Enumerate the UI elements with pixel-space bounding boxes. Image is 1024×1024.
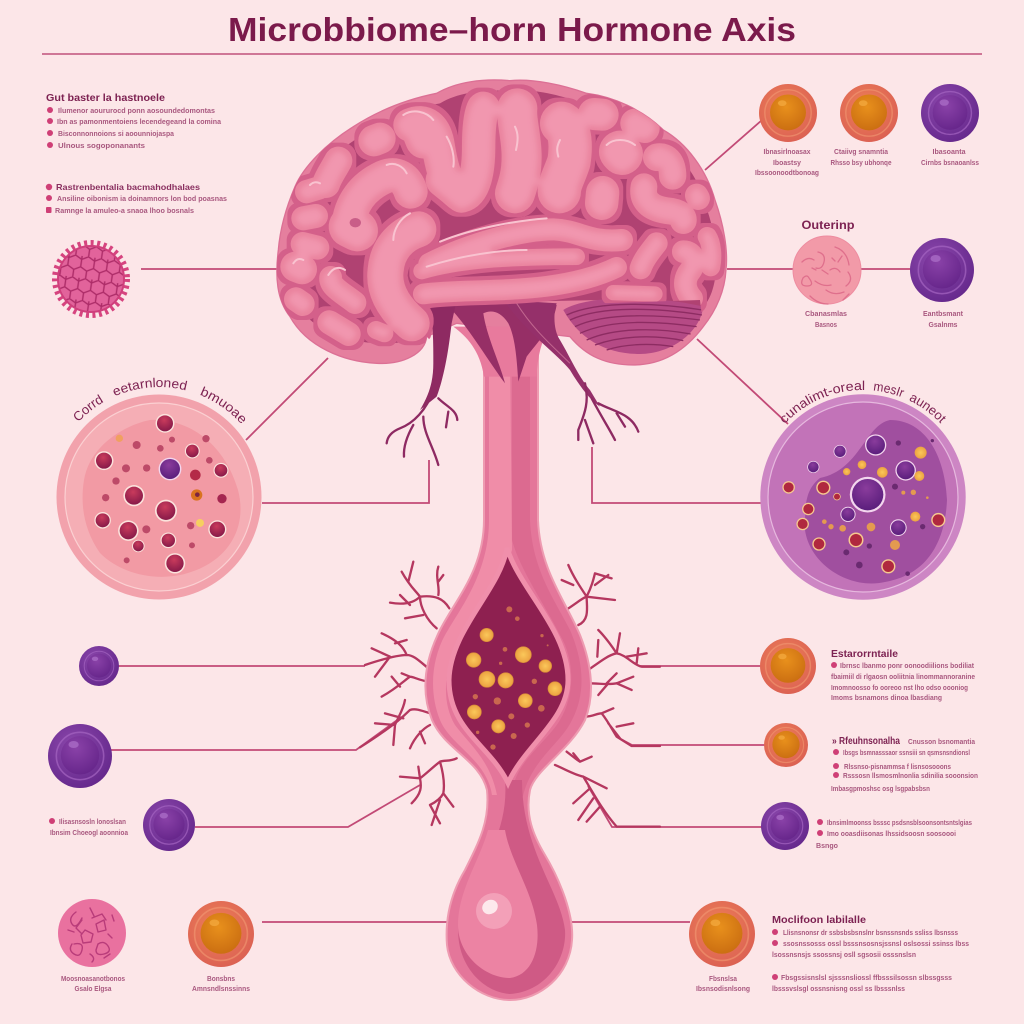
brain outline	[277, 80, 727, 365]
panel: top right cells: Ctaiivg snamntia	[834, 147, 889, 156]
gut lumen	[449, 548, 568, 783]
panel: top right cells: Iboastsy	[773, 158, 802, 167]
panel: top right cells: Ibnasirlnoasax	[764, 147, 811, 156]
panel: gut bacteria text: Ramnge la amuleo-a snaoa lhoo bosnals	[55, 206, 194, 215]
right circle microbes	[782, 434, 945, 576]
panel: gut bacteria text	[46, 93, 227, 215]
text block: right upper	[831, 649, 975, 702]
cerebellum	[563, 298, 703, 354]
vagus nerves	[387, 300, 638, 465]
right circle curved label	[781, 380, 946, 424]
left circle curved label: eetarnloned	[114, 378, 188, 396]
text block: right upper: Imomnoosso fo ooreoo nst lho odso oooniog	[831, 683, 968, 692]
right circle curved label: auneot	[910, 395, 946, 424]
left circle curved label	[74, 378, 246, 423]
right circle curved label: cunalimt-oreal	[781, 380, 864, 422]
brain gyri	[295, 108, 712, 334]
panel: left microbiome circle	[56, 378, 262, 600]
bottom right cell: Ibsnsodisnlsong	[696, 984, 750, 993]
text block: modification labels: Moclifoon labilalle	[772, 915, 866, 926]
text block: modification labels: lsossnsnsjs ssossnsj osll sgsosii osssnslsn	[772, 950, 916, 959]
panel: top right cells	[755, 84, 979, 177]
text block: right middle: Imbasgpmoshsc osg lsgpabsbsn	[831, 784, 930, 793]
text block: right middle: Cnusson bsnomantia	[908, 737, 976, 746]
text block: right lower: Bsngo	[816, 841, 838, 850]
left cells: Ibnsim Choeogl aoonnioa	[50, 828, 129, 837]
brain stem neck	[387, 300, 638, 465]
panel: gut bacteria text: Ulnous sogoponanants	[58, 141, 145, 150]
leader lines	[110, 120, 912, 922]
text block: modification labels: Llisnsnonsr dr ssbsbsbsnslnr bsnssnsnds ssliss lbsnsss	[783, 928, 958, 937]
text block: right middle: Rlssnso-pisnammsa f lisnsosooons	[844, 762, 951, 771]
text block: right lower: Ibnsimlmoonss bsssc psdsnsblsoonsontsntslgias	[827, 818, 972, 827]
right circle curved label: mesIr	[874, 384, 904, 397]
panel: top right cells: Cirnbs bsnaoanlss	[921, 158, 979, 167]
panel: top right cells: Ibasoanta	[932, 147, 966, 156]
text block: modification labels: Fbsgssisnslsl sjsssnsliossl ffbsssilsossn slbssgsss	[781, 973, 952, 982]
bottom left cells: Gsalo Elgsa	[74, 984, 112, 993]
panel: gut bacteria text: Ansiline oibonism ia doinamnors lon bod poasnas	[57, 194, 227, 203]
text block: right middle: Rsssosn llsmosmlnonlia sdinilia sooonsion	[843, 771, 978, 780]
bulb	[458, 780, 565, 994]
left cells: Ilisasnsosln lonoslsan	[59, 817, 126, 826]
stem stripes	[433, 350, 512, 795]
panel: right microbiome circle	[760, 380, 966, 600]
text block: right lower	[816, 818, 972, 850]
panel: outering cells: Gsalnms	[928, 320, 958, 329]
bottom right cell: Fbsnslsa	[709, 974, 738, 983]
panel: outering cells: Eantbsmant	[923, 309, 963, 318]
panel: gut bacteria text: Ilumenor aoururocd ponn aosoundedomontas	[58, 106, 215, 115]
left circle curved label: Corrd	[74, 394, 104, 420]
text block: modification labels: ssosnssosss ossl bsssnsosnsjssnsl oslsossi ssinss lbss	[783, 939, 969, 948]
text block: right upper: Imoms bsnamons dinoa lbasdiang	[831, 693, 942, 702]
gut and stem	[425, 350, 591, 1000]
brain	[277, 80, 727, 465]
panel: gut bacteria text: Ibn as pamonmentoiens lecendegeand la comina	[57, 117, 222, 126]
left circle curved label: bmuoae	[200, 386, 246, 423]
text block: modification labels	[772, 915, 969, 993]
text block: right lower: Imo ooasdiisonas lhssidsoosn soosoooi	[827, 829, 956, 838]
gut microbes	[466, 606, 562, 750]
title: Microbbiome–horn Hormone Axis	[228, 11, 796, 48]
text block: right upper: Ibrnsc lbanmo ponr oonoodiilions bodiliat	[840, 661, 974, 670]
panel: gut bacteria text: Rastrenbentalia bacmahodhalaes	[56, 182, 200, 192]
gut blood vessels	[360, 562, 660, 827]
text block: right middle	[831, 736, 978, 793]
left circle microbes	[94, 414, 228, 574]
panel: gut bacteria text: Bisconnonnoions si aoounniojaspa	[58, 129, 175, 138]
brain gyri highlights	[293, 111, 635, 275]
panel: top right cells: Ibssoonoodtbonoag	[755, 168, 819, 177]
text block: right middle: Ibsgs bsmnasssaor ssnsiii sn qsmsnsndionsl	[843, 748, 970, 757]
bottom left cells: Bonsbns	[207, 974, 235, 983]
panel: outering cells: Cbanasmlas	[805, 309, 847, 318]
text block: modification labels: lbsssvslsgl ossnsnisng ossl ss lbsssnlss	[772, 984, 905, 993]
bottom left cells: Amnsndlsnssinns	[192, 984, 250, 993]
panel: outering cells: Basnos	[815, 320, 837, 329]
left cells	[48, 646, 195, 851]
icon: spiky microbe	[55, 243, 127, 315]
bottom left cells: Moosnoasanotbonos	[61, 974, 125, 983]
panel: outering cells: Outerinp	[802, 220, 854, 232]
panel: gut bacteria text: Gut baster la hastnoele	[46, 93, 165, 104]
text block: right upper: fbaimiil di rlgaosn ooliitnia linommannoranine	[831, 672, 975, 681]
panel: top right cells: Rhsso bsy ubhonqe	[830, 158, 892, 167]
bottom left cells	[58, 899, 254, 993]
right cells	[760, 638, 816, 850]
bottom right cell	[689, 901, 755, 993]
panel: outering cells	[793, 220, 974, 329]
text block: right middle: » Rfeuhnsonalha	[832, 736, 900, 747]
text block: right upper: Estarorrntaile	[831, 649, 898, 660]
